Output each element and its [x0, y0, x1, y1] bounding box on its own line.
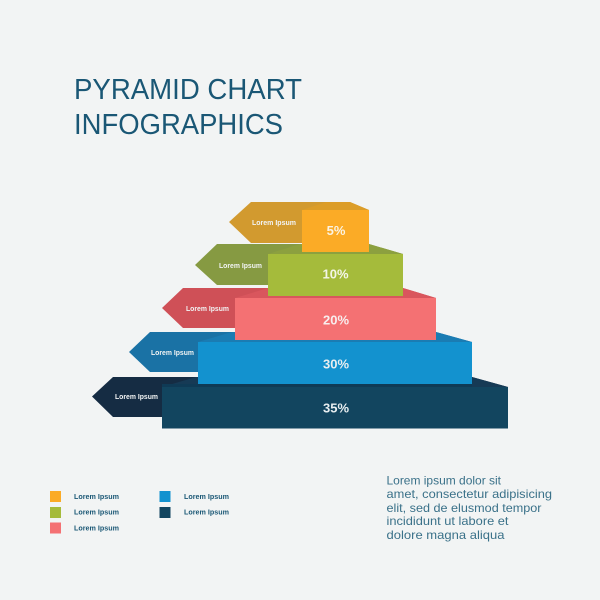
legend item orange	[50, 491, 119, 502]
title: PYRAMID CHART	[74, 74, 302, 106]
block: 10%	[268, 254, 403, 296]
legend	[50, 491, 229, 534]
arrow: blue label	[129, 332, 472, 372]
tier 10% green	[195, 244, 403, 296]
tier 20% red	[162, 288, 436, 340]
legend item blue: Lorem Ipsum	[184, 492, 229, 501]
arrow: navy label	[92, 377, 508, 428]
block: 10%: 10%	[322, 266, 349, 282]
legend item navy: Lorem Ipsum	[184, 508, 229, 516]
block: 20%	[235, 298, 436, 340]
legend item green: Lorem Ipsum	[74, 508, 119, 516]
legend item blue	[160, 491, 229, 502]
legend item red	[50, 522, 119, 534]
block: 20%: 20%	[323, 312, 349, 328]
legend item green	[50, 507, 119, 518]
description text: incididunt ut labore et	[386, 514, 509, 528]
description text: amet, consectetur adipisicing	[386, 487, 552, 501]
block: 30%	[198, 342, 472, 384]
legend item navy	[160, 507, 229, 518]
arrow: orange label: Lorem Ipsum	[252, 218, 296, 227]
arrow: red label	[162, 288, 436, 328]
arrow: red label: Lorem Ipsum	[186, 304, 229, 313]
description text: Lorem ipsum dolor sit	[386, 474, 502, 488]
tier 30% blue	[129, 332, 472, 384]
description text	[386, 474, 552, 542]
pyramid chart	[92, 202, 508, 428]
title	[74, 74, 302, 141]
arrow: green label	[195, 244, 403, 285]
block: 30%: 30%	[323, 356, 349, 372]
title: INFOGRAPHICS	[74, 109, 283, 141]
arrow: green label: Lorem Ipsum	[219, 261, 262, 270]
legend item red: Lorem Ipsum	[74, 524, 119, 532]
arrow: blue label: Lorem Ipsum	[151, 348, 194, 357]
tier 5% orange	[229, 202, 369, 252]
arrow: navy label: Lorem Ipsum	[115, 392, 158, 401]
description text: dolore magna aliqua	[386, 528, 505, 542]
block: 35%	[162, 387, 508, 428]
description text: elit, sed de elusmod tempor	[386, 501, 542, 515]
block: 5%: 5%	[327, 223, 346, 238]
block: 35%: 35%	[323, 400, 349, 416]
tier 35% navy	[92, 377, 508, 428]
legend item orange: Lorem Ipsum	[74, 492, 119, 501]
